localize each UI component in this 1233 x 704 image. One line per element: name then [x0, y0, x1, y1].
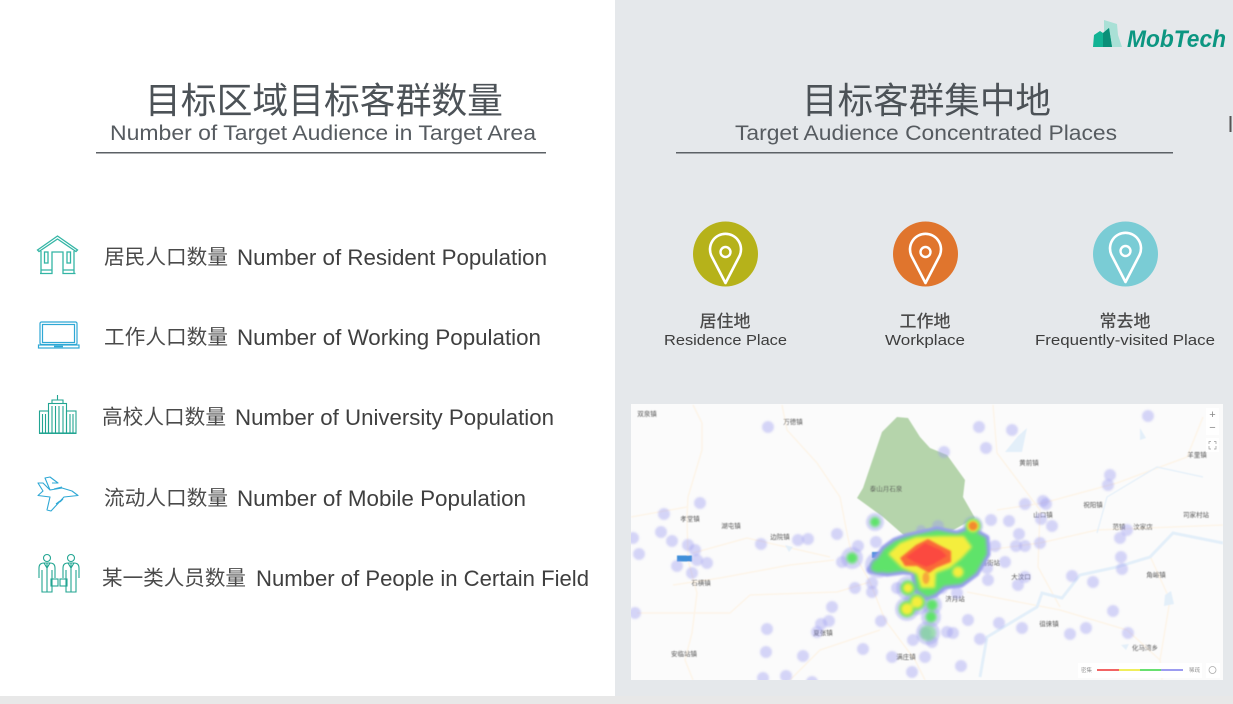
map place labels: 湖屯镇: [721, 520, 741, 530]
map geography: [631, 405, 1223, 680]
label English: Residence Place: [664, 332, 787, 349]
item: residence place: [664, 222, 787, 349]
zoom controls: +: [1209, 409, 1216, 421]
icon: jet plane: [38, 477, 78, 511]
mountain park area: [857, 417, 975, 538]
heading: concentrated places: [676, 73, 1173, 154]
heat map: [627, 404, 1223, 688]
map place labels: 边院镇: [770, 531, 790, 541]
row: resident population: [38, 236, 547, 274]
label English: Number of Mobile Population: [237, 486, 526, 511]
icon: teal location pin: [1093, 222, 1158, 286]
map place labels: 大汶口: [1011, 571, 1031, 581]
label English: Number of People in Certain Field: [256, 566, 589, 591]
map place labels: 满庄镇: [896, 651, 916, 661]
roads: [631, 405, 1223, 680]
item: workplace: [885, 222, 965, 349]
row: mobile population: [38, 477, 526, 511]
heat points: medium density: [846, 517, 987, 641]
cursor bar: [1230, 116, 1232, 132]
icon: office buildings: [39, 395, 76, 434]
map place labels: 上高街站: [974, 557, 1000, 567]
panel background: right: [615, 0, 1233, 696]
panel background: left: [0, 0, 615, 696]
icon: two business people: [39, 554, 79, 592]
map place labels: 安临站镇: [671, 648, 698, 658]
label: 工作人口数量: [104, 320, 228, 350]
icon: house: [38, 236, 78, 274]
label: 高校人口数量: [102, 400, 226, 430]
row: people in certain field: [39, 554, 589, 592]
map place labels: 祝阳镇: [1083, 499, 1103, 509]
map place labels: 汶家店: [1133, 521, 1153, 531]
heat legend: [1078, 663, 1220, 678]
panel: target audience numbers: [38, 72, 589, 592]
map place labels: 孝堂镇: [680, 513, 700, 523]
panel: concentrated places: [627, 73, 1223, 688]
icon: laptop: [38, 322, 79, 348]
heading: target area: [96, 72, 546, 154]
zoom controls: [1206, 412, 1216, 452]
map place labels: 化马湾乡: [1132, 642, 1158, 652]
map place labels: 山口镇: [1033, 509, 1053, 519]
label: 工作地: [900, 307, 950, 332]
map place labels: 羊里镇: [1187, 449, 1207, 459]
label English: Number of University Population: [235, 405, 554, 430]
label English: Number of Resident Population: [237, 245, 547, 270]
label English: Workplace: [885, 332, 965, 349]
row: university population: [39, 395, 554, 434]
map place labels: 夏张镇: [813, 627, 833, 637]
heat points: low density: [627, 410, 1154, 688]
logo wordmark: MobTech: [1127, 26, 1226, 53]
map place labels: 角峪镇: [1146, 569, 1166, 579]
label: 常去地: [1100, 307, 1150, 332]
Chinese title: 目标客群集中地: [802, 73, 1051, 124]
map place labels: 济月站: [945, 593, 965, 603]
map place labels: 范镇: [1112, 521, 1126, 531]
label: 某一类人员数量: [102, 561, 246, 591]
Chinese title: 目标区域目标客群数量: [145, 72, 503, 124]
logo mark: [1093, 20, 1122, 47]
map base: [631, 404, 1223, 680]
label: 居民人口数量: [104, 240, 228, 270]
row: working population: [38, 320, 541, 350]
map place labels: 石横镇: [691, 577, 711, 587]
bottom band: [0, 696, 1233, 704]
map place labels: 双泉镇: [637, 408, 657, 418]
heat points: peak density: [900, 522, 978, 584]
heat legend: 密集: [1081, 666, 1093, 674]
icon: olive location pin: [693, 222, 758, 286]
rivers and lakes: [785, 428, 1223, 677]
map place labels: 黄前镇: [1019, 457, 1039, 467]
label English: Number of Working Population: [237, 325, 541, 350]
item: frequently visited place: [1035, 222, 1215, 349]
English subtitle: Target Audience Concentrated Places: [735, 121, 1117, 145]
map place labels: [637, 408, 1210, 661]
map place labels: 泰山月石泉: [870, 483, 903, 493]
icon: orange location pin: [893, 222, 958, 286]
label English: Frequently-visited Place: [1035, 332, 1215, 349]
heat legend: 稀疏: [1189, 666, 1201, 674]
heat points: high density: [888, 520, 979, 615]
logo: MobTech: [1093, 20, 1226, 53]
heading rule: [96, 152, 546, 154]
heading rule: [676, 152, 1173, 154]
label: 流动人口数量: [104, 481, 228, 511]
map place labels: 徂徕镇: [1039, 618, 1059, 628]
map place labels: 司家村站: [1183, 509, 1210, 519]
zoom controls: −: [1209, 422, 1216, 434]
map place labels: 万德镇: [783, 416, 803, 426]
city tags: [677, 552, 887, 562]
label: 居住地: [700, 307, 750, 332]
English subtitle: Number of Target Audience in Target Area: [110, 121, 536, 145]
